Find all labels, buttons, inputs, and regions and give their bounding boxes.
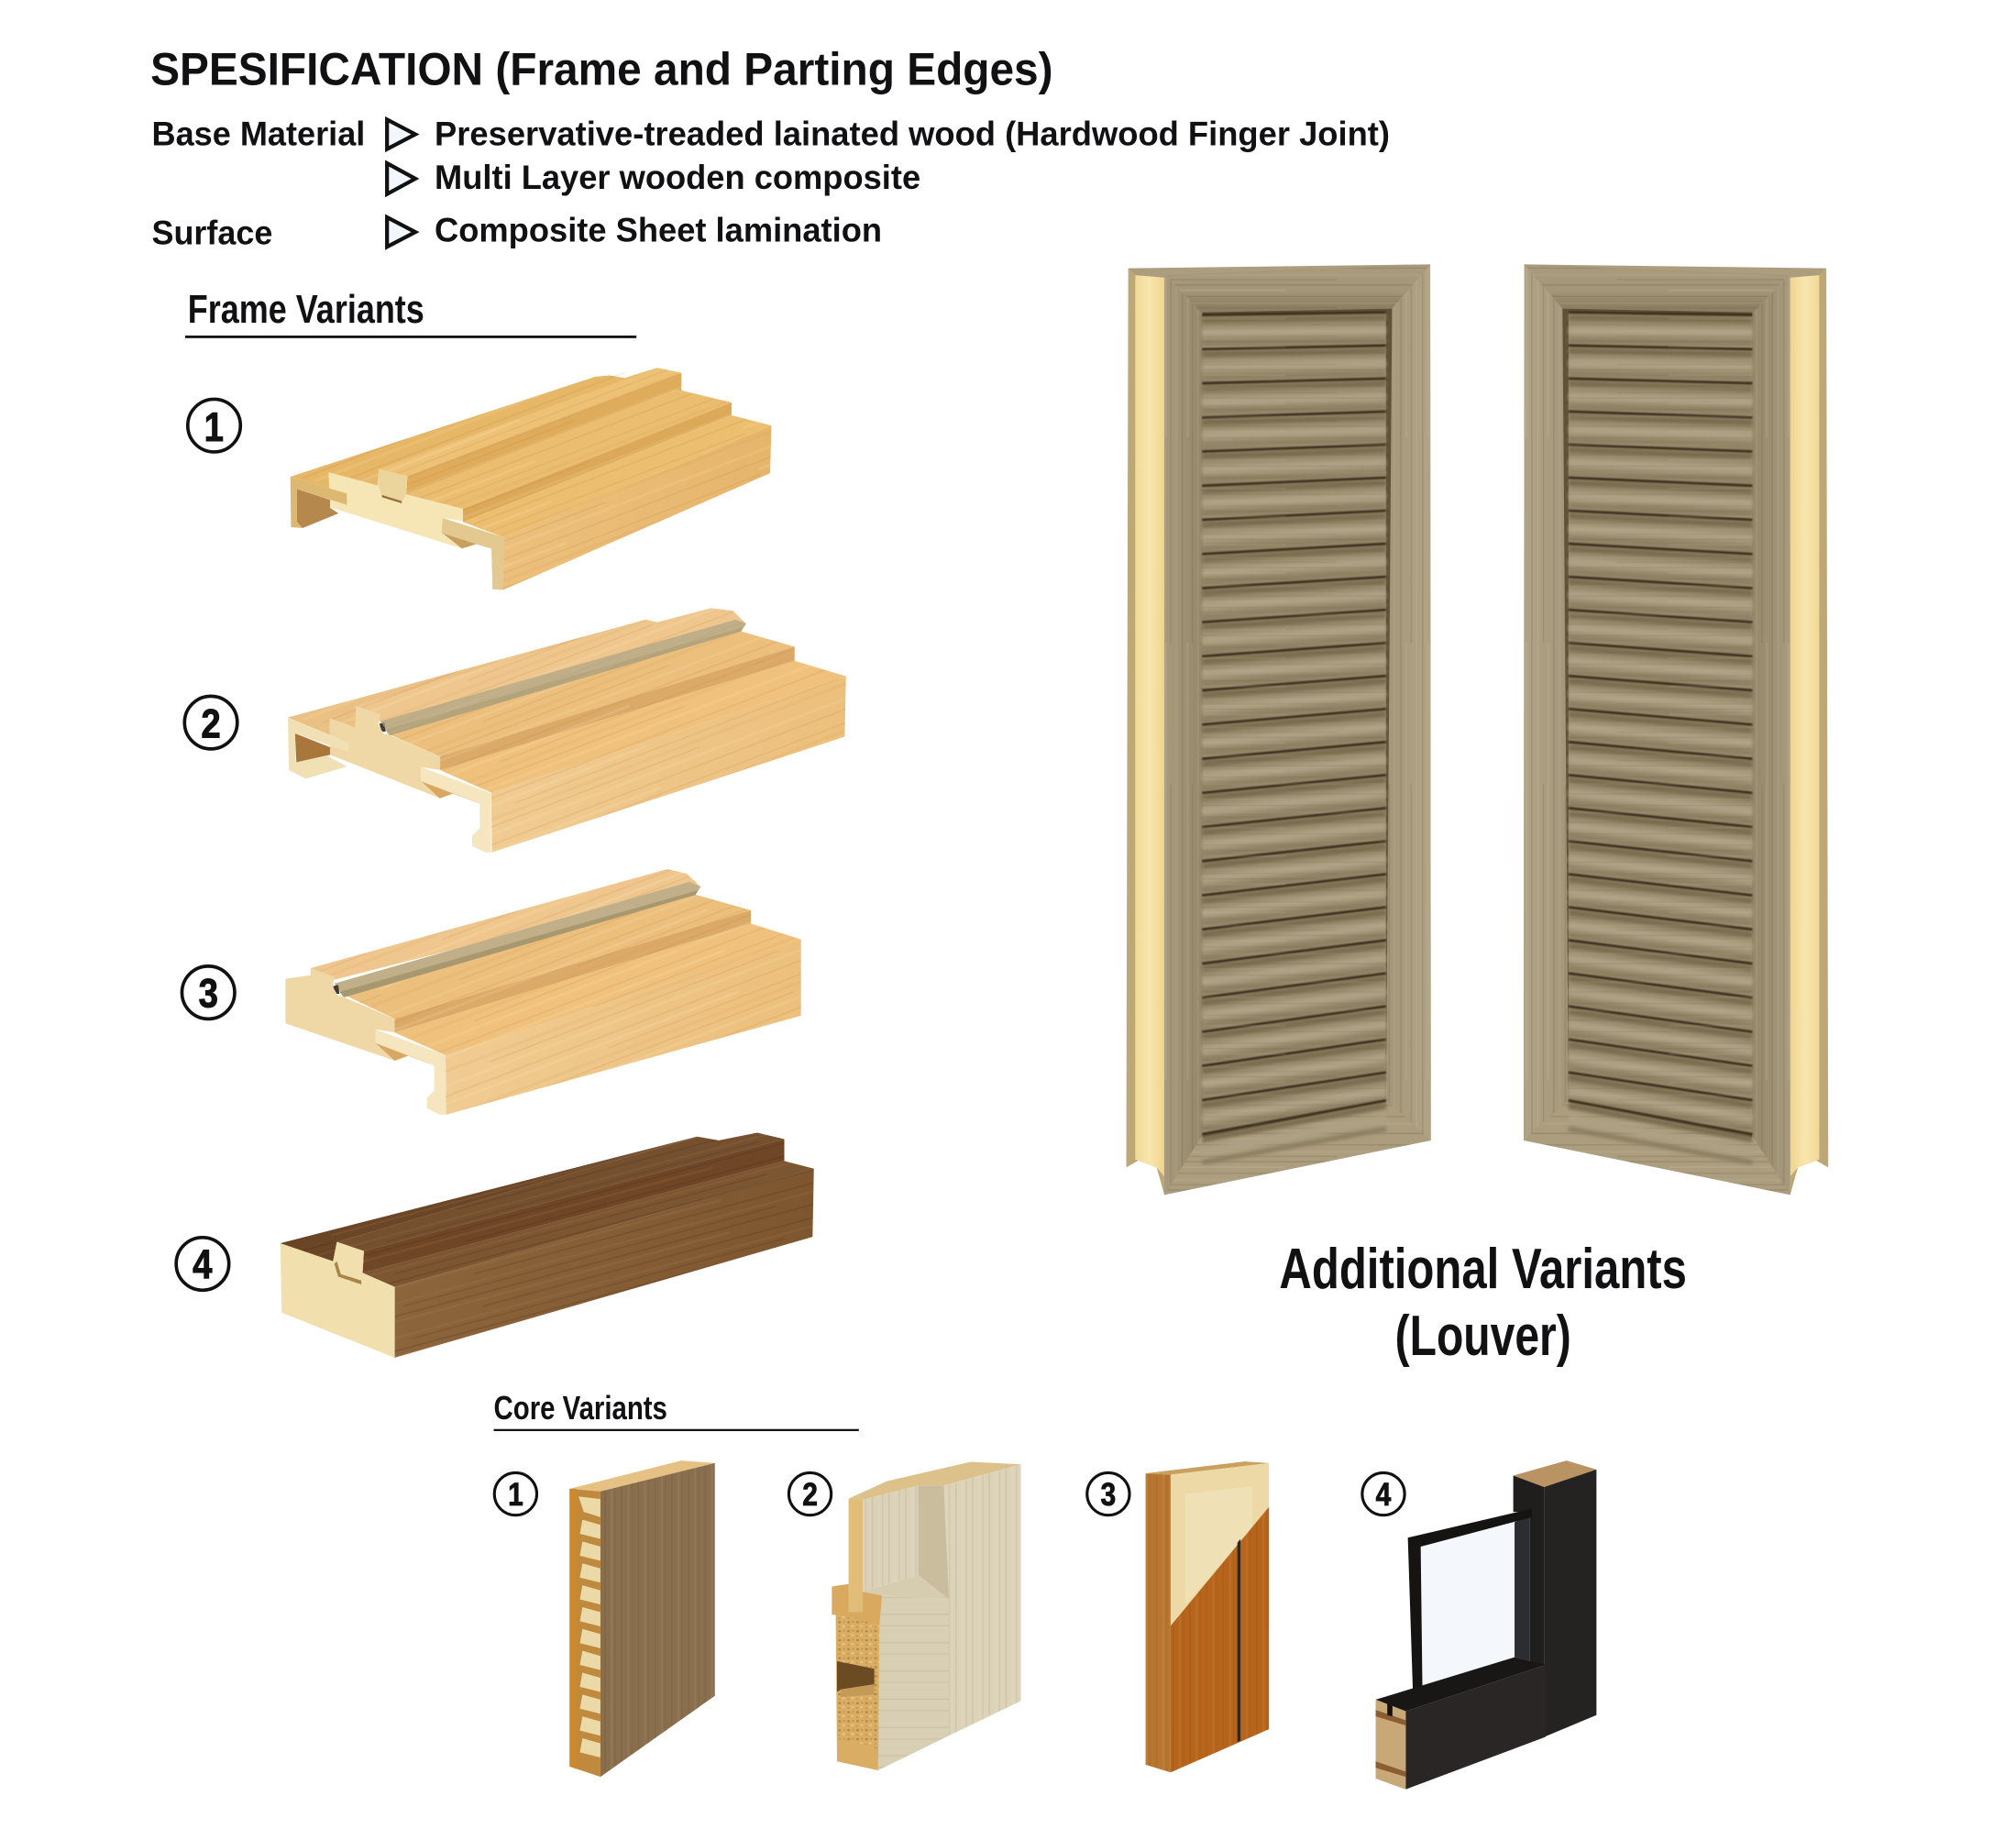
number badge: core 1: 1 (508, 1476, 523, 1513)
number badge: core 2: 2 (802, 1476, 818, 1513)
rib top (379, 368, 681, 476)
right lip (376, 1030, 446, 1115)
thin panel edge (849, 1499, 863, 1613)
rib top (336, 1132, 784, 1251)
lower surface (440, 661, 846, 793)
laminate face (600, 1463, 715, 1777)
rib top (311, 869, 700, 980)
thin panel face (863, 1485, 918, 1592)
label: base material: Base Material (152, 114, 365, 152)
grain overlay (291, 368, 771, 590)
core variant 1: honeycomb (569, 1460, 715, 1777)
top edge (1146, 1461, 1269, 1475)
front face (491, 677, 846, 853)
number badge: frame 4 (176, 1238, 229, 1290)
cross-section (328, 469, 463, 548)
middle surface (386, 632, 795, 756)
right lip (421, 767, 491, 853)
left lip (288, 718, 348, 778)
frame variant 1 (291, 368, 771, 590)
core variant 2: particle board (832, 1461, 1021, 1770)
right lip (442, 518, 504, 589)
frame variant 3 (285, 869, 801, 1115)
caption: additional variants (louver): Additional Variants (1279, 1238, 1687, 1301)
louver door: right (1524, 264, 1828, 1195)
step riser (463, 402, 732, 522)
number badge: core 3 (1087, 1472, 1129, 1515)
cross-section (281, 1242, 395, 1358)
lower surface (394, 923, 801, 1055)
step riser (394, 910, 751, 1032)
icon: triangle arrow 2 (387, 163, 415, 194)
icon: triangle arrow 1 (387, 119, 415, 149)
icon: triangle arrow 3 (387, 217, 415, 247)
number badge: core 1 (494, 1472, 537, 1515)
back top surface (288, 620, 657, 743)
rail top (1376, 1658, 1546, 1712)
groove (1238, 1539, 1240, 1742)
heading: frame variants: Frame Variants (188, 288, 424, 332)
glass (1421, 1522, 1515, 1685)
stile top end (1514, 1460, 1596, 1487)
rib riser (363, 1139, 784, 1273)
specification list (152, 114, 1390, 251)
grain overlay (311, 869, 801, 1115)
number badge: core 2 (788, 1472, 832, 1515)
recess (918, 1485, 949, 1600)
step riser (440, 646, 795, 770)
heading: core variants: Core Variants (494, 1389, 667, 1427)
top surface (849, 1461, 1021, 1500)
label: surface: Surface (152, 213, 272, 251)
left lip (291, 477, 347, 528)
number badge: core 4 (1362, 1472, 1405, 1515)
gasket strip (380, 620, 746, 735)
cross-section (329, 706, 454, 799)
plywood end (1376, 1700, 1405, 1790)
caption: additional variants (louver): (Louver) (1395, 1305, 1571, 1368)
number badge: frame 1 (188, 399, 240, 452)
top edge (569, 1460, 715, 1492)
mdf section (832, 1584, 882, 1625)
veneer face (1171, 1507, 1269, 1772)
middle surface (406, 390, 732, 509)
number badge: frame 2: 2 (201, 700, 221, 746)
cross-section (285, 968, 408, 1061)
number badge: frame 3: 3 (199, 970, 218, 1016)
rib top (356, 608, 745, 722)
frame variant 4 (281, 1132, 814, 1358)
grain overlay (281, 1132, 814, 1358)
tongue groove (335, 1262, 361, 1284)
hollow (837, 1661, 875, 1692)
exposed core (1171, 1463, 1269, 1625)
rib riser (406, 373, 681, 494)
back top surface (281, 1137, 697, 1262)
front face (446, 940, 801, 1115)
right panel (943, 1464, 1021, 1735)
side edge (1146, 1473, 1171, 1772)
gasket highlight (380, 620, 746, 735)
stile side (1514, 1475, 1544, 1666)
inner reveal (1515, 1515, 1530, 1661)
base material value 1: Preservative-treaded lainated wood (Hardwood Finger Joint) (435, 114, 1390, 152)
grain overlay (288, 608, 846, 853)
number badge: core 4: 4 (1376, 1476, 1391, 1513)
core variant 4: black frame with glass (1376, 1460, 1596, 1790)
notch line (382, 495, 402, 503)
rail top (863, 1575, 949, 1600)
title: SPESIFICATION (Frame and Parting Edges) (150, 43, 1053, 95)
number badge: frame 2 (184, 696, 237, 749)
caption: additional variants (louver) (1279, 1238, 1687, 1368)
number badge: frame 1: 1 (204, 403, 224, 450)
surface value: Composite Sheet lamination (435, 211, 882, 249)
front face (395, 1169, 814, 1358)
number badge: core 3: 3 (1101, 1476, 1116, 1513)
base material value 2: Multi Layer wooden composite (435, 158, 920, 196)
front face (502, 425, 771, 590)
lower surface (463, 415, 771, 537)
frame variant 2 (288, 608, 846, 853)
rail faces (878, 1595, 949, 1770)
glazing bar (1408, 1509, 1532, 1695)
rib end (378, 469, 407, 501)
number badge: frame 3 (182, 966, 235, 1019)
left lip interior (295, 733, 330, 763)
number badge: frame 4: 4 (193, 1241, 213, 1287)
left lip interior (297, 489, 338, 528)
honeycomb side (569, 1489, 600, 1777)
lower surface (363, 1161, 814, 1287)
louver door: left (1127, 264, 1431, 1195)
core variant 3: solid core (1146, 1461, 1269, 1772)
back top surface (291, 368, 657, 493)
gasket strip (333, 882, 700, 997)
rail front (1405, 1665, 1546, 1790)
middle surface (339, 895, 751, 1019)
particle section (836, 1614, 879, 1770)
stile front (1544, 1470, 1596, 1737)
